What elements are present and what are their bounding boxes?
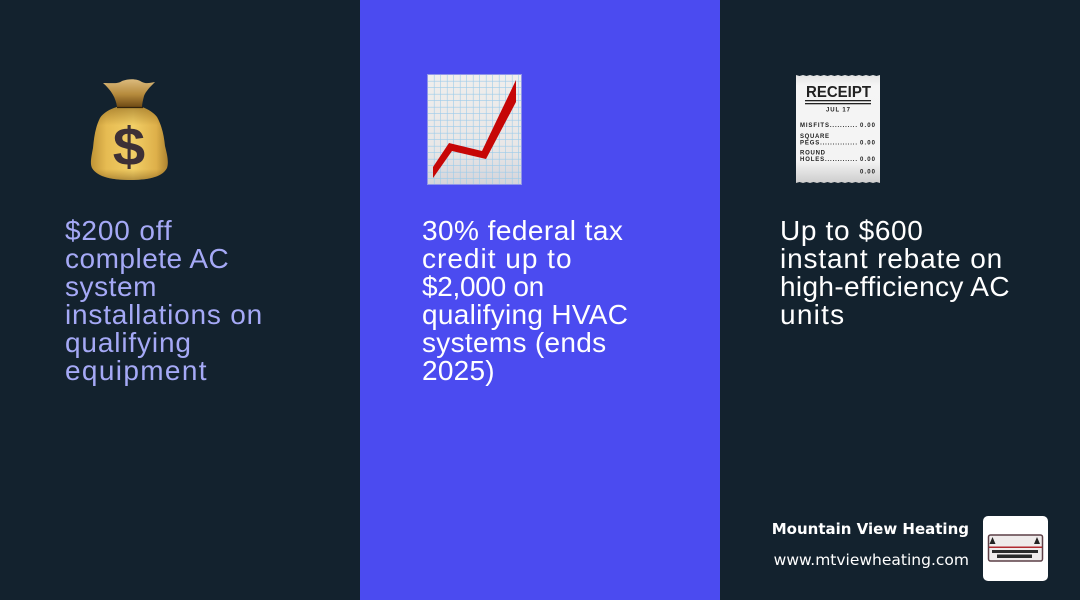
- website: www.mtviewheating.com: [774, 551, 969, 569]
- text: tax credit: credit up to: [422, 243, 573, 274]
- text: discount: $200 off: [65, 215, 172, 246]
- text: tax credit: 2025): [422, 355, 495, 386]
- panel: tax credit: [360, 0, 720, 600]
- panel: discount: [0, 0, 360, 600]
- text: rebate: Up to $600: [780, 215, 924, 246]
- text: rebate: [780, 215, 1010, 330]
- icon: receipt: 0.00: [860, 123, 876, 129]
- text: discount: equipment: [65, 355, 208, 386]
- panel: rebate: [720, 0, 1080, 600]
- text: discount: system: [65, 271, 157, 302]
- icon: receipt: 0.00: [860, 157, 876, 163]
- icon: receipt: [796, 75, 880, 183]
- text: rebate: units: [780, 299, 845, 330]
- icon: receipt: 0.00: [860, 140, 876, 146]
- text: discount: [65, 215, 263, 386]
- text: rebate: instant rebate on: [780, 243, 1003, 274]
- icon: receipt: ROUND: [800, 150, 826, 156]
- text: tax credit: systems (ends: [422, 327, 606, 358]
- logo: [983, 516, 1048, 581]
- text: discount: qualifying: [65, 327, 192, 358]
- icon: receipt: 0.00: [860, 170, 876, 176]
- icon: receipt: SQUARE: [800, 134, 829, 140]
- icon: receipt: MISFITS...........: [800, 123, 857, 129]
- icon: receipt: JUL 17: [826, 108, 851, 114]
- icon: receipt: HOLES.............: [800, 157, 857, 163]
- text: rebate: high-efficiency AC: [780, 271, 1010, 302]
- brand name: Mountain View Heating: [772, 520, 969, 538]
- text: discount: complete AC: [65, 243, 229, 274]
- text: tax credit: [422, 215, 628, 386]
- icon: money bag: [90, 79, 168, 180]
- text: discount: installations on: [65, 299, 263, 330]
- text: tax credit: 30% federal tax: [422, 215, 623, 246]
- dollar sign: $: [113, 116, 145, 177]
- icon: receipt: RECEIPT: [806, 84, 872, 101]
- icon: receipt: PEGS...............: [800, 140, 857, 146]
- text: tax credit: qualifying HVAC: [422, 299, 628, 330]
- icon: chart increasing: [427, 74, 522, 185]
- text: tax credit: $2,000 on: [422, 271, 544, 302]
